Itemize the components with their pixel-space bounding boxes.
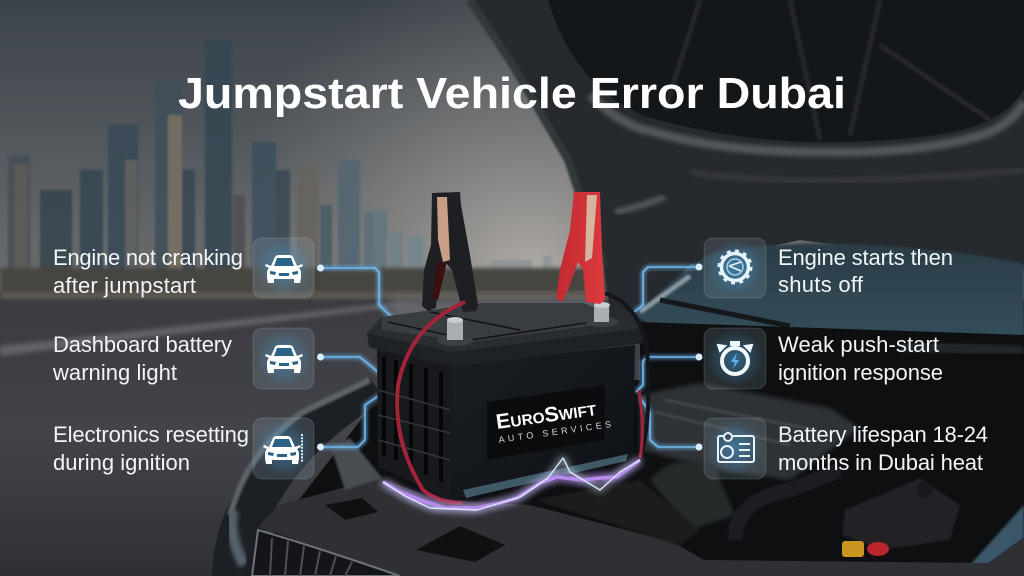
red jumper cable [397,302,465,503]
connector dot [317,444,324,450]
car front: fender, radiator support, grille [212,378,1024,576]
item: engine starts then shuts off [696,238,953,298]
battery label plate [487,385,605,460]
label: ignition response [778,360,943,385]
battery front face [450,345,635,500]
tile glow [707,420,763,476]
background: road and shoreline [0,268,640,576]
icon: car [265,255,303,283]
icon: car [265,345,303,373]
connector dot [696,354,702,360]
label: Engine not cranking [53,245,243,270]
tile [704,238,766,298]
label: warning light [52,360,177,385]
item: engine not cranking [53,238,324,298]
tile glow [256,420,312,476]
title: Jumpstart Vehicle Error Dubai [178,69,846,118]
engine bay [240,322,1024,576]
tile [704,418,766,479]
positive terminal [586,302,618,327]
red jumper clamp [556,192,605,304]
label: during ignition [53,450,190,475]
tile glow [707,330,763,386]
black jumper clamp [422,192,478,312]
dark jumper cable [605,293,648,460]
battery side ribs [378,357,450,482]
right red cable [639,390,642,458]
left connector lines [320,268,395,447]
battery side face [377,345,453,500]
car battery [367,302,643,500]
negative terminal [437,317,473,346]
label: Battery lifespan 18-24 [778,422,988,447]
label: months in Dubai heat [778,450,983,475]
icon: ID card with timer [718,433,754,462]
electric arc [383,458,640,510]
battery teal bottom strip [463,454,628,498]
right connector lines [634,267,699,447]
label: Dashboard battery [53,332,232,357]
background: Dubai skyline [8,40,552,280]
connector dot [317,264,324,272]
tile [253,328,314,389]
item: electronics resetting [53,418,324,479]
tile glow [707,240,763,296]
icon: stopwatch [718,341,752,374]
brand logo: EuroSwift [494,397,598,434]
tile glow [256,240,312,296]
open car hood [470,0,1024,325]
background: hazy sky [0,0,1024,300]
connector dot [317,354,324,360]
label: shuts off [778,272,864,297]
icon: gear gauge [720,252,750,282]
item: weak push-start [696,328,943,389]
item: dashboard warning [52,328,324,389]
icon: car with gauge [263,434,302,464]
tile [253,238,314,298]
windshield and wiper [636,244,1024,340]
tile glow [256,330,312,386]
item: battery lifespan [696,418,988,479]
tile [253,418,314,479]
label: Engine starts then [778,245,953,270]
label: after jumpstart [53,273,196,298]
brand logo [494,395,615,445]
brand logo: AUTO SERVICES [498,419,615,445]
tile [704,328,766,389]
label: Weak push-start [778,332,939,357]
battery lid [367,303,643,367]
connector dot [696,444,702,450]
label: Electronics resetting [53,422,249,447]
connector dot [696,264,702,270]
